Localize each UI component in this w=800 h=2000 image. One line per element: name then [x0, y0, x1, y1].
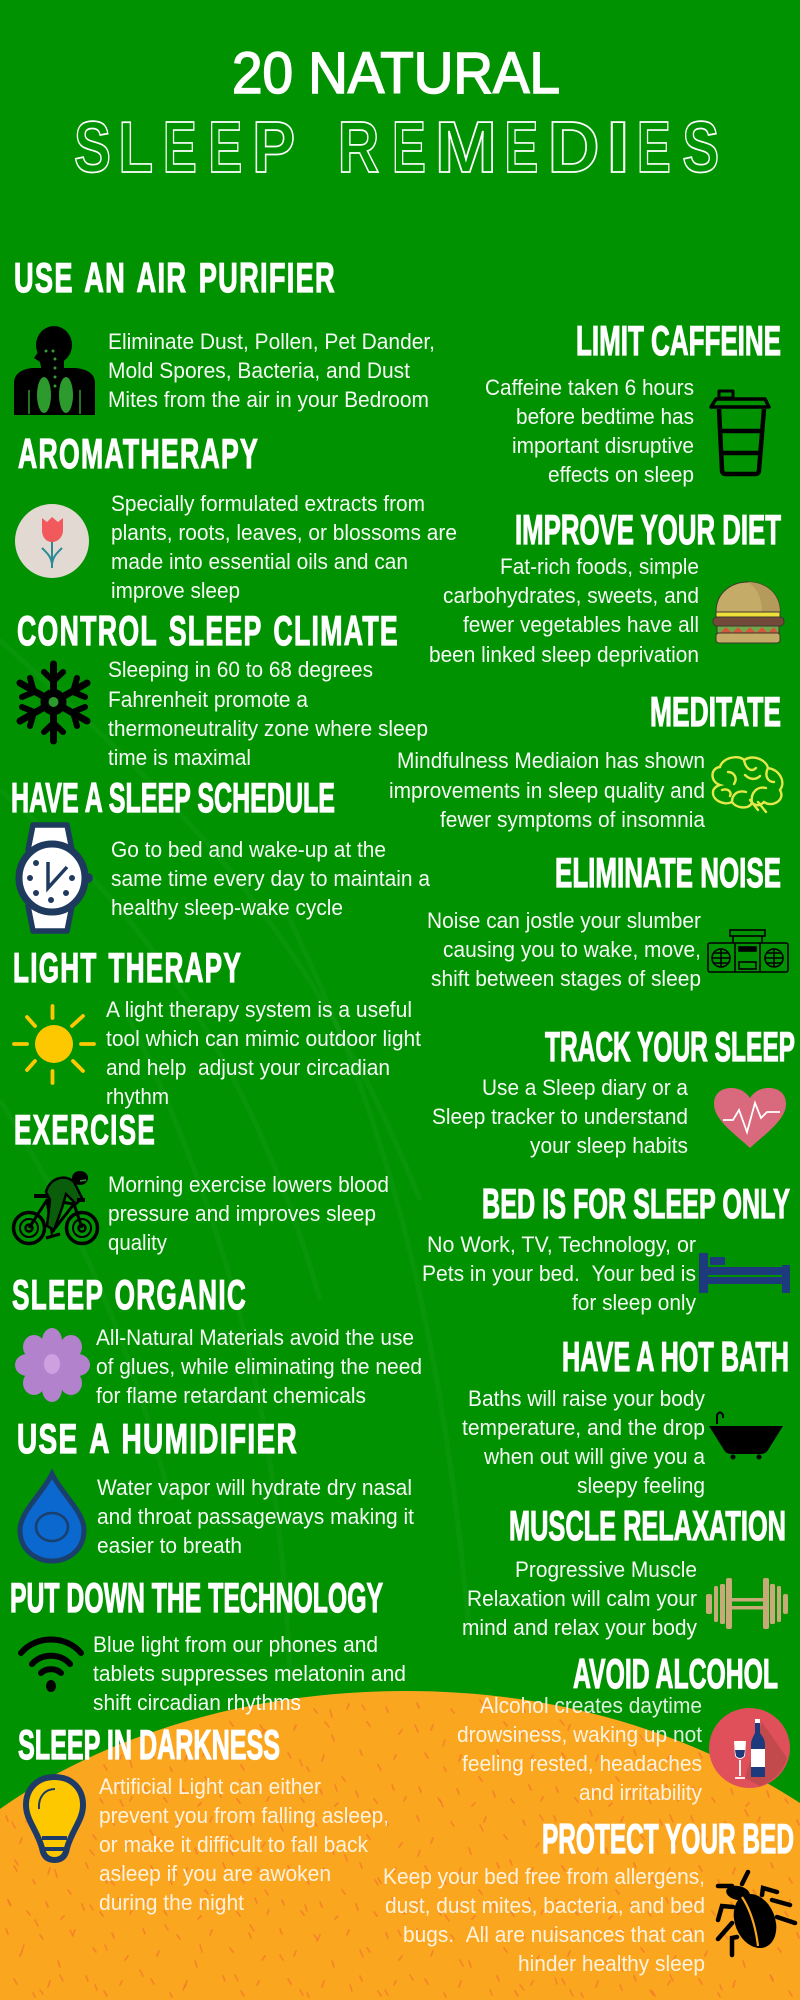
- remedy: improve your diet: [429, 506, 784, 667]
- body text: Relaxation will calm your: [467, 1586, 697, 1611]
- icon: bed: [699, 1253, 790, 1293]
- body text: Eliminate Dust, Pollen, Pet Dander,: [108, 329, 435, 354]
- body text: [96, 1325, 422, 1408]
- body text: Sleeping in 60 to 68 degrees: [108, 657, 373, 682]
- body text: [427, 908, 701, 991]
- title: sleep remedies outlined: E: [208, 107, 242, 188]
- icon: boombox: [708, 930, 788, 972]
- body text: All-Natural Materials avoid the use: [96, 1325, 414, 1350]
- body text: [462, 1557, 697, 1640]
- body text: [93, 1632, 406, 1715]
- body text: been linked sleep deprivation: [429, 642, 699, 667]
- heading: PUT DOWN THE TECHNOLOGY: [10, 1574, 383, 1621]
- body text: Noise can jostle your slumber: [427, 908, 701, 933]
- remedy: use a humidifier: [17, 1415, 414, 1561]
- body text: [99, 1774, 389, 1915]
- body text: A light therapy system is a useful: [106, 997, 412, 1022]
- heading: EXERCISE: [14, 1106, 156, 1153]
- title: sleep remedies outlined: E: [163, 107, 197, 188]
- icon: cyclist: [14, 1171, 98, 1244]
- body text: pressure and improves sleep: [108, 1201, 376, 1226]
- body text: Artificial Light can either: [99, 1774, 321, 1799]
- body text: healthy sleep-wake cycle: [111, 895, 343, 920]
- body text: time is maximal: [108, 745, 251, 770]
- title: sleep remedies outlined: L: [118, 107, 153, 188]
- body text: when out will give you a: [483, 1444, 706, 1469]
- body text: fewer vegetables have all: [463, 612, 699, 637]
- icon: flower: [15, 1328, 90, 1402]
- body text: Fat-rich foods, simple: [500, 554, 699, 579]
- body text: Alcohol creates daytime: [480, 1693, 702, 1718]
- body text: Go to bed and wake-up at the: [111, 837, 386, 862]
- body text: temperature, and the drop: [462, 1415, 705, 1440]
- title: sleep remedies outlined: [74, 107, 719, 188]
- body text: feeling rested, headaches: [462, 1751, 702, 1776]
- body text: fewer symptoms of insomnia: [440, 807, 706, 832]
- title: sleep remedies outlined: I: [606, 107, 630, 187]
- title: sleep remedies outlined: E: [637, 107, 671, 188]
- body text: Morning exercise lowers blood: [108, 1172, 389, 1197]
- heading: LIGHT THERAPY: [13, 944, 242, 991]
- body text: Sleep tracker to understand: [432, 1104, 688, 1129]
- body text: prevent you from falling asleep,: [99, 1803, 389, 1828]
- body text: [432, 1075, 689, 1158]
- remedy: meditate: [389, 688, 782, 832]
- heading: AROMATHERAPY: [18, 430, 259, 477]
- orange hill background: [0, 1691, 800, 2000]
- heading: USE A HUMIDIFIER: [17, 1415, 298, 1462]
- body text: before bedtime has: [516, 404, 694, 429]
- body text: tool which can mimic outdoor light: [106, 1026, 421, 1051]
- heading: CONTROL SLEEP CLIMATE: [17, 607, 399, 654]
- body text: tablets suppresses melatonin and: [93, 1661, 406, 1686]
- body text: [383, 1864, 705, 1976]
- title: sleep remedies outlined: S: [74, 107, 111, 188]
- icon: coffee cup: [711, 391, 769, 474]
- icon: dumbbell: [706, 1578, 788, 1629]
- icon: bed bug: [718, 1872, 795, 1955]
- body text: [457, 1693, 702, 1805]
- remedy: aromatherapy: [15, 430, 457, 603]
- icon: lightbulb: [26, 1777, 83, 1860]
- remedy: use an air purifier: [14, 254, 435, 415]
- body text: [108, 1172, 389, 1255]
- remedy: track your sleep: [432, 1023, 795, 1158]
- body text: Mindfulness Mediaion has shown: [397, 748, 705, 773]
- body text: [108, 329, 435, 412]
- body text: quality: [108, 1230, 167, 1255]
- body text: bugs. All are nuisances that can: [403, 1922, 705, 1947]
- title: sleep remedies outlined: E: [392, 107, 426, 188]
- body text: of glues, while eliminating the need: [96, 1354, 422, 1379]
- body text: during the night: [99, 1890, 244, 1915]
- body text: Progressive Muscle: [515, 1557, 697, 1582]
- body text: [422, 1232, 696, 1315]
- icon: burger: [713, 582, 784, 643]
- body text: easier to breath: [97, 1533, 242, 1558]
- body text: Specially formulated extracts from: [111, 491, 425, 516]
- remedy: sleep organic: [12, 1271, 422, 1408]
- title: 20 natural: 20 NATURAL: [232, 41, 560, 106]
- body text: Pets in your bed. Your bed is: [422, 1261, 696, 1286]
- icon: tulip in circle: [15, 504, 89, 578]
- body text: carbohydrates, sweets, and: [443, 583, 699, 608]
- heading: SLEEP ORGANIC: [12, 1271, 247, 1318]
- body text: for flame retardant chemicals: [96, 1383, 366, 1408]
- body text: your sleep habits: [530, 1133, 688, 1158]
- remedy: bed is for sleep only: [422, 1180, 790, 1315]
- remedy: limit caffeine: [485, 317, 781, 487]
- body text: [111, 491, 457, 603]
- body text: thermoneutrality zone where sleep: [108, 716, 428, 741]
- body text: important disruptive: [512, 433, 694, 458]
- icon: heart with pulse: [714, 1088, 786, 1148]
- body text: Fahrenheit promote a: [108, 687, 309, 712]
- body text: Mold Spores, Bacteria, and Dust: [108, 358, 410, 383]
- body text: shift between stages of sleep: [431, 966, 701, 991]
- icon: watch: [19, 825, 93, 931]
- title: sleep remedies outlined: M: [435, 107, 497, 188]
- body text: Water vapor will hydrate dry nasal: [97, 1475, 412, 1500]
- body text: dust, dust mites, bacteria, and bed: [385, 1893, 705, 1918]
- body text: and help adjust your circadian: [106, 1055, 390, 1080]
- title: sleep remedies outlined: S: [682, 107, 719, 188]
- body text: causing you to wake, move,: [443, 937, 701, 962]
- body text: [97, 1475, 414, 1558]
- body text: made into essential oils and can: [111, 549, 408, 574]
- remedy: protect your bed: [383, 1815, 795, 1976]
- body text: Use a Sleep diary or a: [482, 1075, 689, 1100]
- body text: [429, 554, 699, 667]
- remedy: have a hot bath: [462, 1333, 789, 1498]
- body text: Mites from the air in your Bedroom: [108, 387, 429, 412]
- body text: for sleep only: [572, 1290, 696, 1315]
- body text: [106, 997, 421, 1109]
- body text: asleep if you are awoken: [99, 1861, 331, 1886]
- title: sleep remedies outlined: R: [338, 107, 379, 187]
- body text: or make it difficult to fall back: [99, 1832, 369, 1857]
- body text: sleepy feeling: [577, 1473, 705, 1498]
- body text: and irritability: [579, 1780, 702, 1805]
- body text: [485, 375, 694, 487]
- title: sleep remedies outlined: E: [504, 107, 538, 188]
- remedy: control sleep climate: [17, 607, 428, 770]
- body text: [111, 837, 431, 920]
- icon: wifi: [21, 1640, 81, 1692]
- remedy: put down the technology: [10, 1574, 406, 1715]
- body text: improvements in sleep quality and: [389, 778, 705, 803]
- body text: [462, 1386, 706, 1498]
- body text: drowsiness, waking up not: [457, 1722, 702, 1747]
- remedy: sleep in darkness: [18, 1721, 389, 1915]
- title: sleep remedies outlined: P: [252, 107, 295, 188]
- icon: lungs in person: [14, 326, 95, 415]
- title: sleep remedies outlined: D: [548, 108, 600, 188]
- heading: HAVE A SLEEP SCHEDULE: [11, 774, 335, 821]
- body text: No Work, TV, Technology, or: [427, 1232, 696, 1257]
- icon: brain: [712, 757, 782, 812]
- icon: bathtub: [709, 1412, 783, 1460]
- icon: sun: [14, 1006, 94, 1083]
- body text: rhythm: [106, 1084, 169, 1109]
- body text: mind and relax your body: [462, 1615, 697, 1640]
- body text: Keep your bed free from allergens,: [383, 1864, 705, 1889]
- remedy: eliminate noise: [427, 849, 788, 991]
- heading: USE AN AIR PURIFIER: [14, 254, 336, 301]
- remedy: avoid alcohol: [457, 1650, 790, 1805]
- icon: water drop: [20, 1474, 84, 1561]
- body text: plants, roots, leaves, or blossoms are: [111, 520, 457, 545]
- remedy: exercise: [14, 1106, 389, 1255]
- body text: and throat passageways making it: [97, 1504, 414, 1529]
- icon: snowflake: [20, 664, 87, 741]
- body text: Baths will raise your body: [468, 1386, 705, 1411]
- body text: [108, 657, 428, 770]
- body text: shift circadian rhythms: [93, 1690, 301, 1715]
- remedy: have a sleep schedule: [11, 774, 431, 931]
- remedy: muscle relaxation: [462, 1502, 788, 1640]
- remedy: light therapy: [13, 944, 421, 1109]
- body text: same time every day to maintain a: [111, 866, 431, 891]
- body text: Blue light from our phones and: [93, 1632, 378, 1657]
- body text: Caffeine taken 6 hours: [485, 375, 694, 400]
- body text: improve sleep: [111, 578, 240, 603]
- body text: effects on sleep: [548, 462, 694, 487]
- heading: SLEEP IN DARKNESS: [18, 1721, 280, 1768]
- body text: hinder healthy sleep: [518, 1951, 705, 1976]
- body text: [389, 748, 706, 832]
- icon: wine bottle and glass: [709, 1708, 790, 1788]
